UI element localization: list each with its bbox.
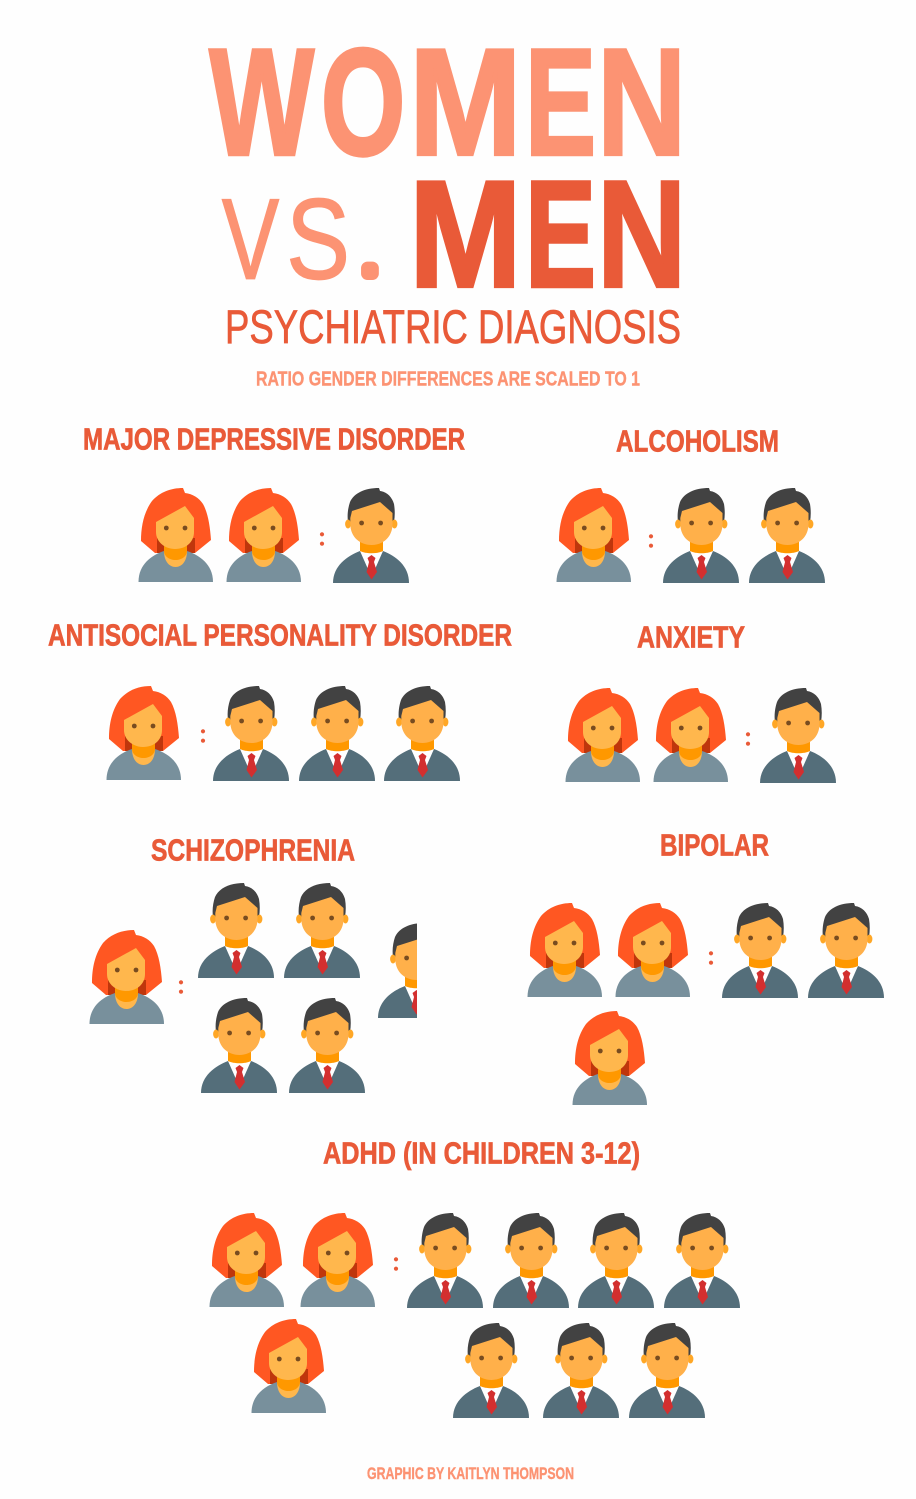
title — [209, 16, 686, 353]
panel: alcoholism — [556, 424, 825, 583]
ratio icons: 1 woman to 3 men — [106, 686, 460, 781]
title word: WOMEN: M — [409, 18, 522, 187]
title word: VS.: S — [286, 176, 350, 303]
ratio icons: 3 women to 7 men — [210, 1213, 740, 1418]
title word: MEN: M — [409, 150, 522, 319]
heading: SCHIZOPHRENIA — [151, 832, 355, 868]
ratio icons: 1 woman to 2 men — [556, 488, 825, 583]
title word: WOMEN: N — [597, 18, 686, 187]
heading: ADHD (IN CHILDREN 3-12) — [323, 1136, 640, 1170]
title word: MEN — [409, 149, 686, 319]
title word: MEN: E — [525, 149, 596, 319]
title word: WOMEN: O — [321, 16, 405, 187]
panel: schizophrenia — [90, 838, 417, 1093]
heading: MAJOR DEPRESSIVE DISORDER — [83, 422, 465, 456]
panel: major depressive disorder — [83, 422, 465, 583]
title word: WOMEN: W — [209, 19, 314, 188]
panel: anxiety — [566, 620, 836, 783]
title word: VS. — [222, 176, 377, 303]
ratio icons: 3 women to 2 men — [528, 903, 884, 1105]
panel: bipolar — [528, 828, 884, 1105]
ratio icons: 1 woman to 4.5 men — [90, 883, 417, 1093]
heading: ANTISOCIAL PERSONALITY DISORDER — [48, 618, 512, 652]
title word: MEN: N — [597, 150, 686, 319]
scale note: RATIO GENDER DIFFERENCES ARE SCALED TO 1 — [256, 368, 640, 390]
ratio icons: 2 women to 1 man — [138, 488, 409, 583]
credit: GRAPHIC BY KAITLYN THOMPSON — [367, 1465, 574, 1483]
heading: ALCOHOLISM — [616, 424, 779, 458]
panel: adhd — [210, 1136, 740, 1418]
title word: VS.: . — [363, 228, 377, 284]
heading: BIPOLAR — [660, 828, 769, 862]
heading: ANXIETY — [637, 620, 745, 654]
title word: WOMEN — [209, 16, 686, 188]
title word: WOMEN: E — [525, 17, 596, 187]
panel: antisocial personality disorder — [48, 618, 512, 781]
subtitle: PSYCHIATRIC DIAGNOSIS — [225, 300, 681, 353]
title word: VS.: V — [222, 176, 279, 303]
ratio icons: 2 women to 1 man — [566, 688, 836, 783]
